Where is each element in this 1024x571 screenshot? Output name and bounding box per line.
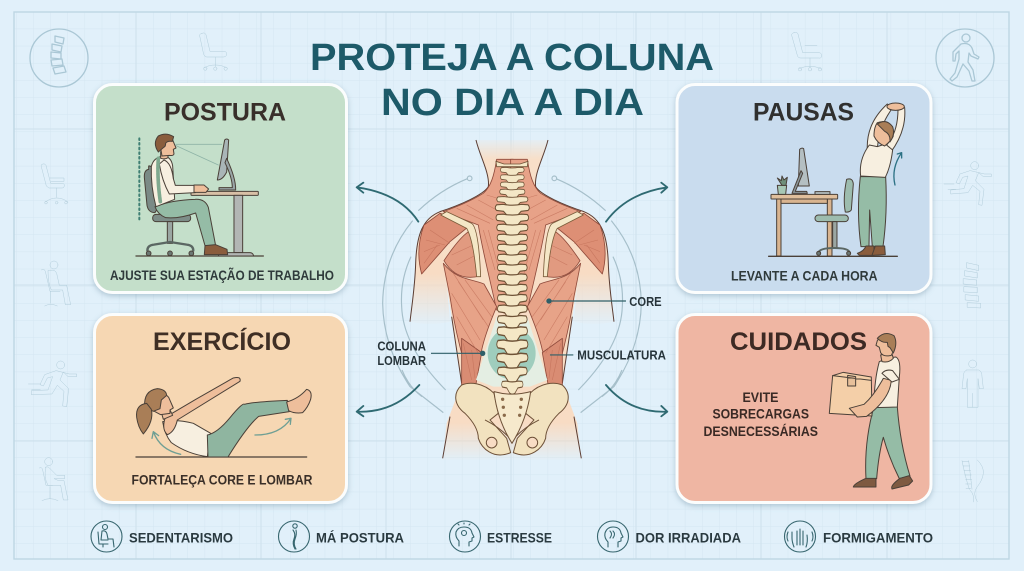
caption: exercicio: FORTALEÇA CORE E LOMBAR [132,472,312,488]
icon: bent posture [278,521,310,552]
symptom: formigamento [784,521,933,552]
title [310,37,714,124]
heading: pausas: PAUSAS [753,98,854,126]
caption: postura: AJUSTE SUA ESTAÇÃO DE TRABALHO [110,266,334,283]
symptom: sedentarismo [91,521,233,552]
icon: standing person [962,360,983,407]
center anatomy diagram [357,140,667,460]
symptom: ma postura [278,521,404,552]
label: coluna lombar: LOMBAR [377,353,427,368]
pelvis [456,383,568,455]
caption: cuidados: EVITE [742,389,778,405]
heading: cuidados: CUIDADOS [730,328,867,356]
lumbar fascia highlight [476,317,547,387]
label: core: CORE [629,294,662,309]
left column icons [28,164,77,501]
icon: head with pain [598,521,628,552]
icon: stressed head [450,521,480,552]
spine vertebrae [495,167,529,394]
illustration: core exercise [136,377,311,457]
illustration: person stretching by desk [769,103,905,256]
neck vertebra cap [496,161,528,167]
symptom: formigamento: FORMIGAMENTO [823,530,933,546]
illustration: seated person at desk [136,134,263,256]
icon: runner [944,162,991,205]
title: PROTEJA A COLUNA [310,37,714,79]
heading: postura: POSTURA [164,98,286,126]
symptom: ma postura: MÁ POSTURA [316,530,404,546]
icon: walking person in circle top right [936,29,994,87]
symptom: dor irradiada: DOR IRRADIADA [636,530,741,546]
icon: vertebrae [963,263,981,308]
symptom: dor irradiada [598,521,741,552]
symptom: estresse [450,521,552,552]
caption: cuidados [704,389,818,439]
label: coluna lombar: COLUNA [377,339,427,354]
illustration: person carrying a box [829,334,913,489]
caption: cuidados: SOBRECARGAS [712,406,809,422]
icon: running figure [28,361,77,407]
icon: spine in circle top left [30,29,88,87]
caption: pausas: LEVANTE A CADA HORA [731,268,878,284]
icon: tingling hand [784,521,816,552]
heading: exercicio: EXERCÍCIO [153,327,291,356]
bottom symptoms row [91,521,933,552]
icon: seated worker [39,458,68,501]
title: NO DIA A DIA [381,82,644,124]
symptom: sedentarismo: SEDENTARISMO [129,530,233,546]
panel: postura [94,84,346,292]
panel: exercicio [94,314,346,502]
concentric arcs [383,176,641,413]
muscles [419,159,605,387]
icon: chair top right [792,32,822,71]
icon: seated figure [41,261,71,306]
icon: spine side view [962,460,983,502]
right column icons [944,162,991,502]
symptom: estresse: ESTRESSE [487,530,552,546]
label: musculatura: MUSCULATURA [577,347,667,362]
icon: seated person [91,521,122,552]
callout lines [431,298,626,356]
torso silhouette [410,140,614,460]
panel: cuidados [677,314,931,502]
background icons [28,29,994,502]
arrows [357,183,667,416]
panel: pausas [677,84,931,292]
label: coluna lombar [377,339,427,368]
icon: chair top left [200,33,227,70]
caption: cuidados: DESNECESSÁRIAS [704,423,818,439]
icon: office chair [41,164,68,204]
